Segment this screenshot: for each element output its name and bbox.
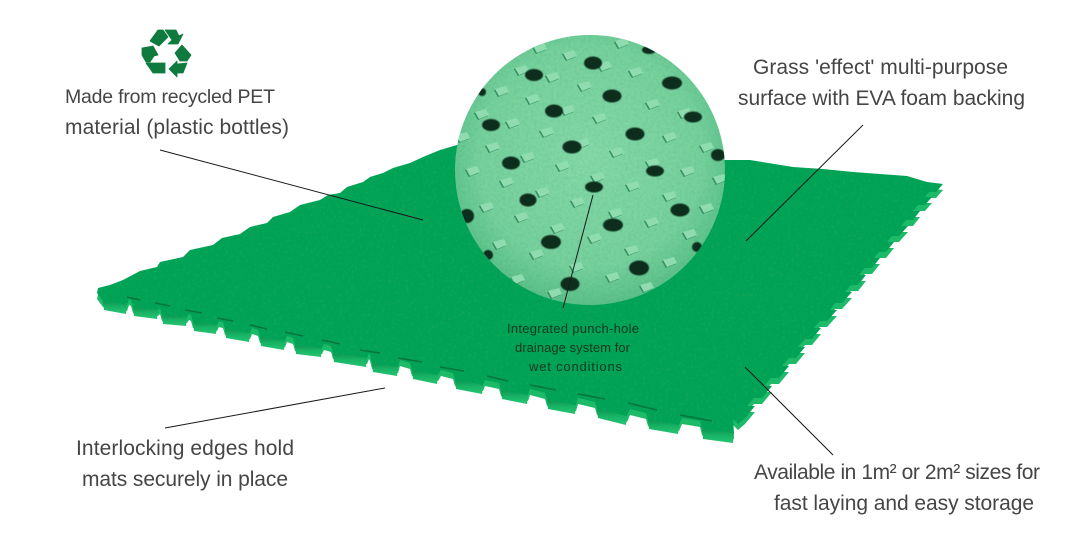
callout: interlocking edges [76, 388, 385, 491]
mat top surface [97, 145, 943, 433]
icon: recycling symbol [142, 30, 191, 77]
callout: recycled PET: material (plastic bottles) [65, 116, 289, 139]
callout: recycled PET [65, 86, 423, 220]
callout: sizes [745, 367, 1040, 515]
circle base [455, 35, 725, 305]
callout: recycled PET: Made from recycled PET [65, 86, 275, 108]
callout: drainage system [507, 195, 639, 374]
callout: interlocking edges: mats securely in place [82, 468, 288, 491]
callout: sizes: fast laying and easy storage [774, 492, 1034, 515]
callout: interlocking edges: Interlocking edges hold [76, 437, 294, 460]
mat: interlocking green surface [97, 145, 943, 443]
callout: grass effect surface: Grass 'effect' multi-purpose [753, 56, 1008, 79]
callout: drainage system: drainage system for [515, 340, 631, 355]
drainage holes [460, 46, 725, 291]
front faces of interlocking teeth [103, 301, 734, 443]
callout: grass effect surface: surface with EVA foam backing [738, 87, 1025, 110]
callout: grass effect surface [738, 56, 1025, 241]
interlock seam shadows [127, 297, 712, 421]
callout: drainage system: wet conditions [528, 359, 622, 374]
embossed diamond pattern [455, 38, 727, 299]
callout: drainage system: Integrated punch-hole [507, 321, 639, 336]
callout: sizes: Available in 1m² or 2m² sizes for [754, 461, 1040, 484]
mat edge thickness [97, 151, 943, 439]
magnified circle: punch-hole surface detail [455, 35, 727, 305]
